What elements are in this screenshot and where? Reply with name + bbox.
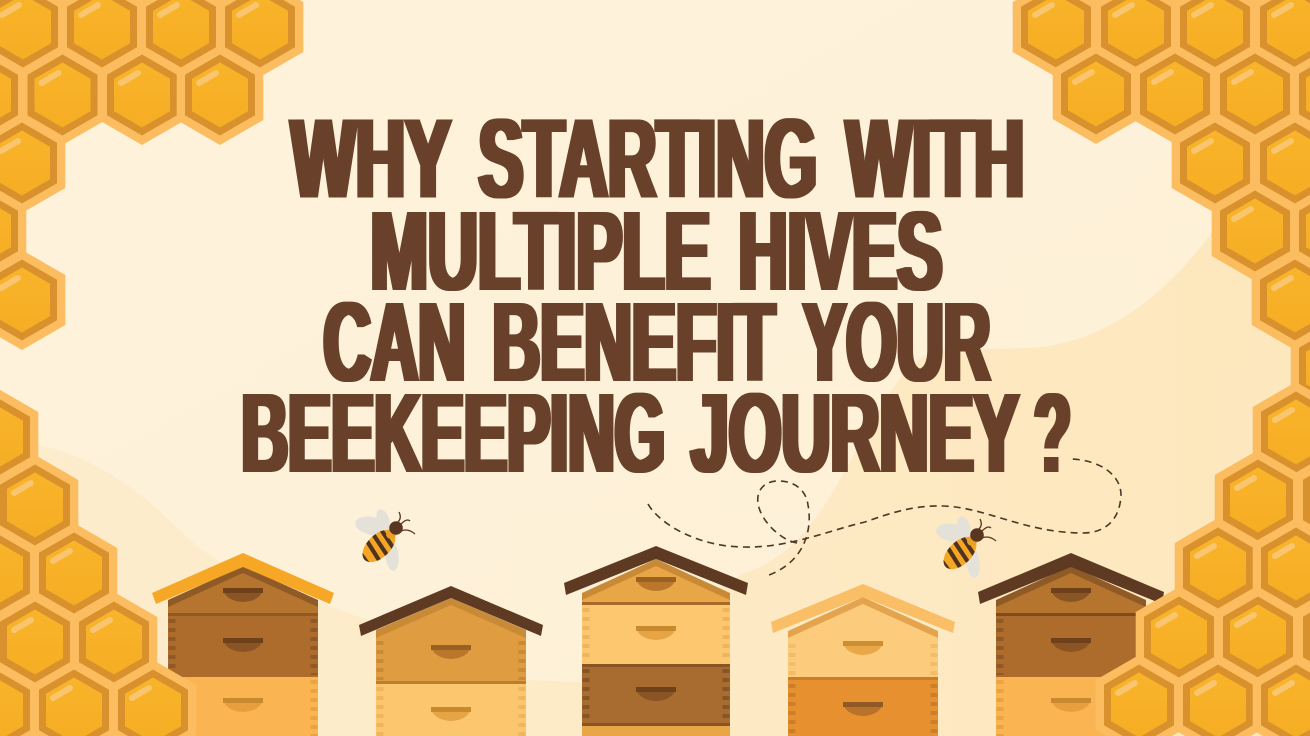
honeycomb bottom right [1096,382,1310,736]
hive 4 [771,584,955,736]
title [242,96,1071,496]
honeycomb top right [1013,0,1310,418]
title: CAN [324,279,466,405]
hive 5 [978,553,1164,736]
title: YOUR [803,279,990,405]
hive 1 [152,553,334,736]
icon: bee right [933,515,996,579]
title: WITH [846,96,1024,222]
title: MULTIPLE [370,188,710,314]
hive 2 [359,586,543,736]
honeycomb top left [0,0,303,350]
title: ? [1034,370,1071,496]
title: BENEFIT [492,279,775,405]
hive 3 [564,546,748,736]
title: STARTING [478,96,817,222]
dashed bee flight path [648,459,1121,575]
honeycomb bottom left [0,387,196,736]
title: JOURNEY [691,370,1019,496]
title: BEEKEEPING [242,370,665,496]
title: HIVES [738,188,942,314]
title: WHY [291,96,451,222]
icon: bee left [352,508,415,572]
